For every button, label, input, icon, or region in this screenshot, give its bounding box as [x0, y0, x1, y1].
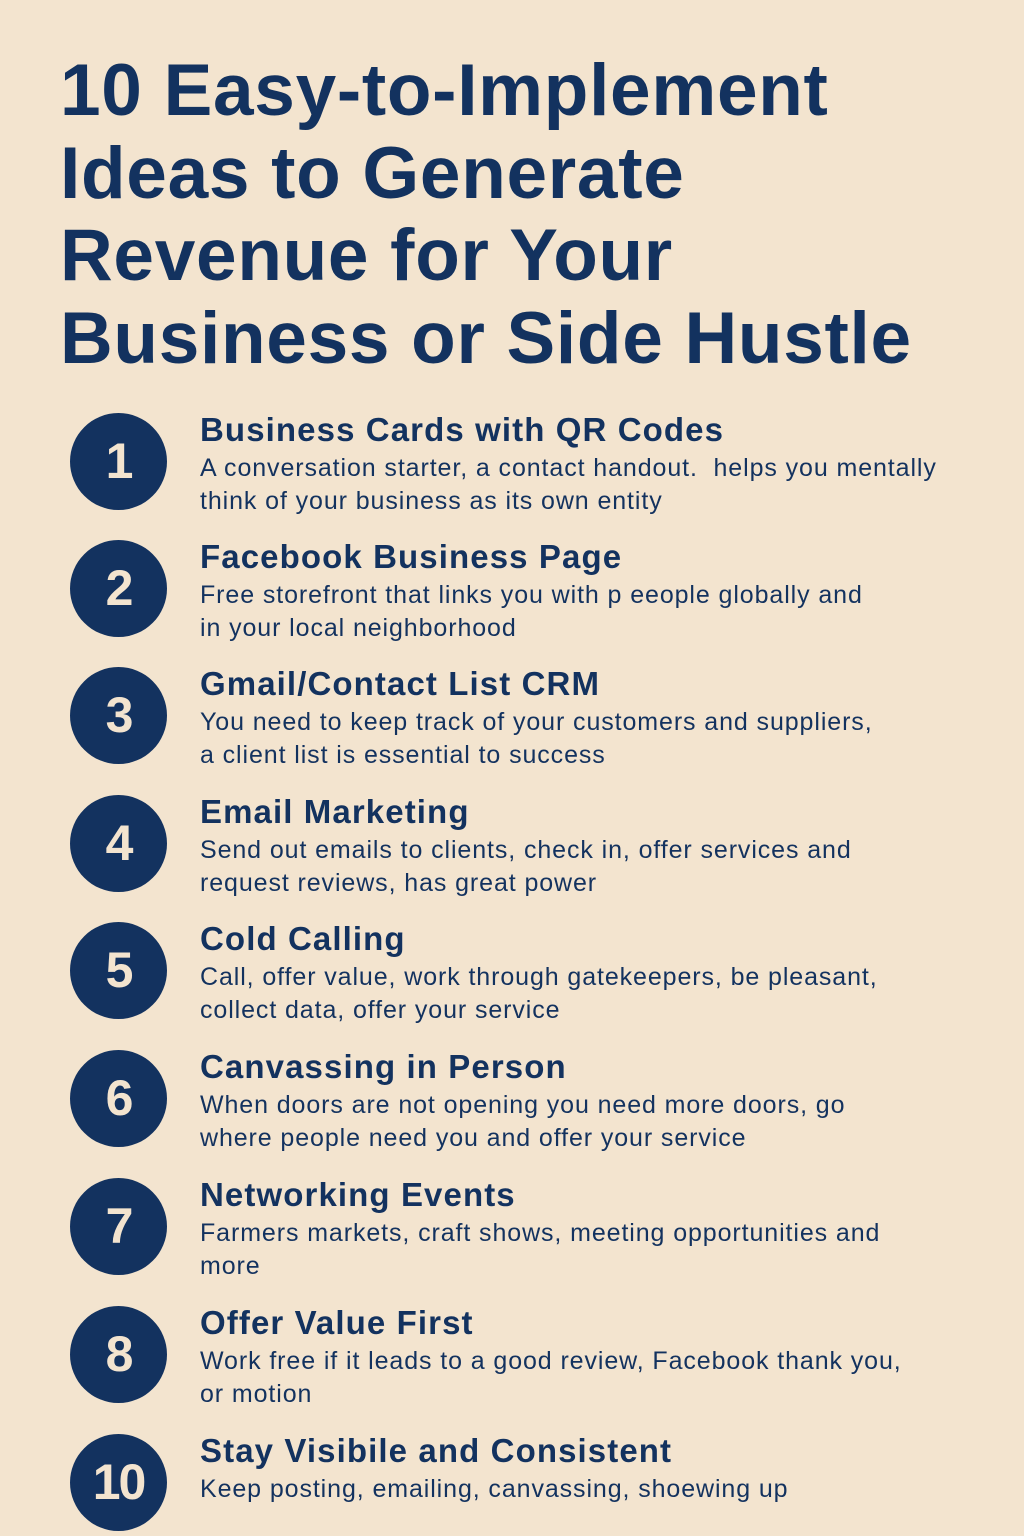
- item 10: Stay Visibile and Consistent: [200, 1432, 672, 1469]
- item 10: [70, 1432, 788, 1531]
- item 5: Cold Calling: [200, 920, 406, 957]
- item 8: or motion: [200, 1380, 312, 1408]
- item 4: Send out emails to clients, check in, offer services and: [200, 836, 852, 864]
- item 7: more: [200, 1252, 261, 1280]
- item 8: [70, 1304, 902, 1408]
- item 2: 2: [106, 560, 131, 616]
- item 3: a client list is essential to success: [200, 741, 606, 769]
- item 1: think of your business as its own entity: [200, 487, 663, 515]
- item 4: [70, 793, 852, 897]
- item 8: Offer Value First: [200, 1304, 474, 1341]
- title: Revenue for Your: [60, 215, 673, 296]
- item 3: [70, 665, 873, 769]
- item 7: Farmers markets, craft shows, meeting opportunities and: [200, 1219, 880, 1247]
- item 10: Keep posting, emailing, canvassing, shoewing up: [200, 1475, 788, 1503]
- item 4: 4: [106, 815, 131, 871]
- item 1: A conversation starter, a contact handout. helps you mentally: [200, 454, 937, 482]
- item 3: 3: [106, 687, 131, 743]
- item 4: Email Marketing: [200, 793, 470, 830]
- item 3: Gmail/Contact List CRM: [200, 665, 600, 702]
- item 8: 8: [106, 1326, 131, 1382]
- item 4: request reviews, has great power: [200, 869, 597, 897]
- item 2: in your local neighborhood: [200, 614, 517, 642]
- item 1: Business Cards with QR Codes: [200, 411, 724, 448]
- title: Ideas to Generate: [60, 132, 685, 214]
- item 6: 6: [106, 1070, 131, 1126]
- item 6: [70, 1048, 845, 1152]
- item 2: Free storefront that links you with p eeople globally and: [200, 581, 863, 609]
- item 1: 1: [106, 433, 131, 489]
- item 10: 10: [93, 1454, 144, 1510]
- item 7: Networking Events: [200, 1176, 516, 1213]
- item 7: [70, 1176, 880, 1280]
- item 3: You need to keep track of your customers and suppliers,: [200, 708, 873, 736]
- title: [60, 50, 912, 378]
- title: Business or Side Hustle: [60, 298, 912, 378]
- item 5: [70, 920, 878, 1024]
- item 1: [70, 411, 937, 515]
- item 6: Canvassing in Person: [200, 1048, 567, 1085]
- item 5: Call, offer value, work through gatekeepers, be pleasant,: [200, 963, 878, 991]
- title: 10 Easy-to-Implement: [60, 50, 829, 131]
- item 7: 7: [106, 1198, 131, 1254]
- item 2: Facebook Business Page: [200, 538, 622, 575]
- item 2: [70, 538, 863, 642]
- item 6: When doors are not opening you need more doors, go: [200, 1091, 845, 1119]
- item 6: where people need you and offer your service: [200, 1124, 746, 1152]
- item 8: Work free if it leads to a good review, Facebook thank you,: [200, 1347, 902, 1375]
- item 5: 5: [106, 942, 131, 998]
- item 5: collect data, offer your service: [200, 996, 560, 1024]
